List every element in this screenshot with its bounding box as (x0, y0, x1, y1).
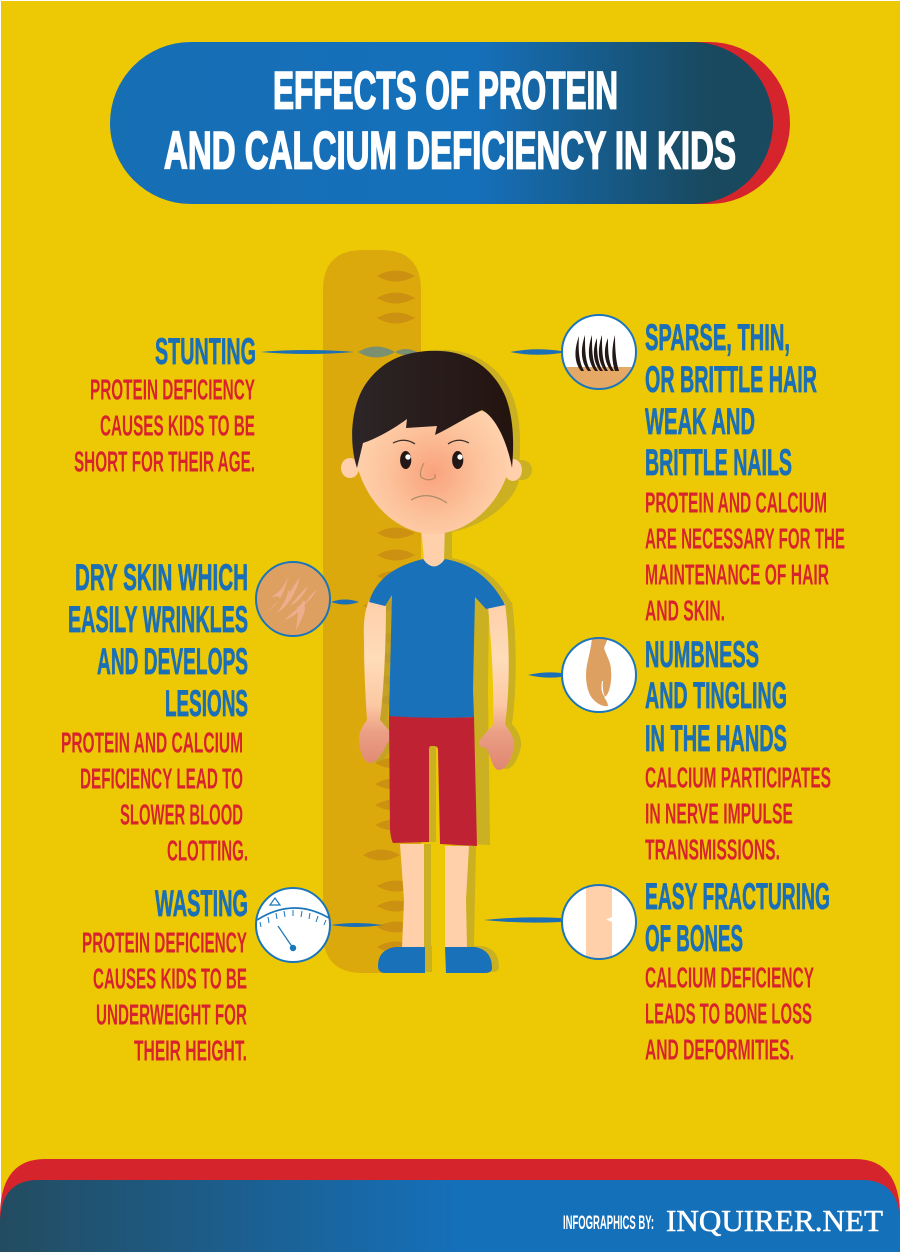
text: wasting: THEIR HEIGHT. (134, 1036, 247, 1068)
mouth (411, 496, 447, 503)
text: hair and nails: AND SKIN. (645, 596, 725, 628)
text: numbness: NUMBNESS (645, 634, 759, 675)
footer credit: INQUIRER.NET (666, 1203, 883, 1238)
nose (420, 463, 435, 480)
text: dry skin: PROTEIN AND CALCIUM (61, 728, 243, 760)
text: dry skin: SLOWER BLOOD (120, 800, 243, 832)
text: stunting: PROTEIN DEFICIENCY (90, 374, 255, 406)
boy shadow (359, 350, 532, 972)
text: stunting: CAUSES KIDS TO BE (100, 410, 255, 442)
footer credit: INFOGRAPHICS BY: (563, 1213, 654, 1234)
neck (421, 525, 445, 569)
boy figure (341, 351, 522, 973)
arms (359, 600, 514, 770)
text: wasting: PROTEIN DEFICIENCY (82, 928, 247, 960)
ears (341, 458, 522, 481)
text: dry skin: DRY SKIN WHICH (75, 557, 248, 598)
text: bones: OF BONES (645, 918, 743, 959)
icon: bone (562, 880, 636, 964)
text: wasting: WASTING (155, 883, 248, 924)
title: EFFECTS OF PROTEIN (273, 62, 618, 120)
text: numbness (645, 634, 831, 866)
text: stunting: SHORT FOR THEIR AGE. (74, 446, 255, 478)
text: dry skin: DEFICIENCY LEAD TO (80, 764, 243, 796)
shirt (369, 559, 505, 718)
text: wasting: CAUSES KIDS TO BE (93, 964, 247, 996)
text: dry skin: AND DEVELOPS (97, 641, 248, 682)
text: numbness: TRANSMISSIONS. (645, 834, 780, 866)
footer band (0, 1159, 900, 1252)
text: bones (645, 876, 830, 1066)
text: dry skin (61, 557, 248, 868)
icon: weighing scale (256, 888, 330, 962)
pointers (260, 349, 561, 927)
shorts (389, 715, 477, 846)
legs (400, 844, 469, 948)
icon: dry skin (256, 562, 330, 636)
text: dry skin: CLOTTING. (167, 836, 248, 868)
face (354, 406, 513, 534)
height ruler (323, 250, 421, 973)
text: dry skin: EASILY WRINKLES (68, 599, 248, 640)
text: wasting: UNDERWEIGHT FOR (96, 1000, 247, 1032)
text: stunting (74, 331, 256, 478)
footer credit (563, 1203, 883, 1238)
text: hair and nails: WEAK AND (645, 401, 755, 442)
icon: hair follicles (560, 315, 638, 393)
eyes and brows (393, 440, 469, 469)
text: wasting (82, 883, 248, 1068)
text: dry skin: LESIONS (165, 683, 248, 724)
icon: hand (562, 638, 636, 712)
hair (352, 351, 513, 468)
shoes (378, 947, 492, 973)
title (164, 62, 736, 180)
text: stunting: STUNTING (155, 331, 256, 372)
title banner (110, 42, 790, 204)
text: hair and nails (645, 317, 845, 628)
